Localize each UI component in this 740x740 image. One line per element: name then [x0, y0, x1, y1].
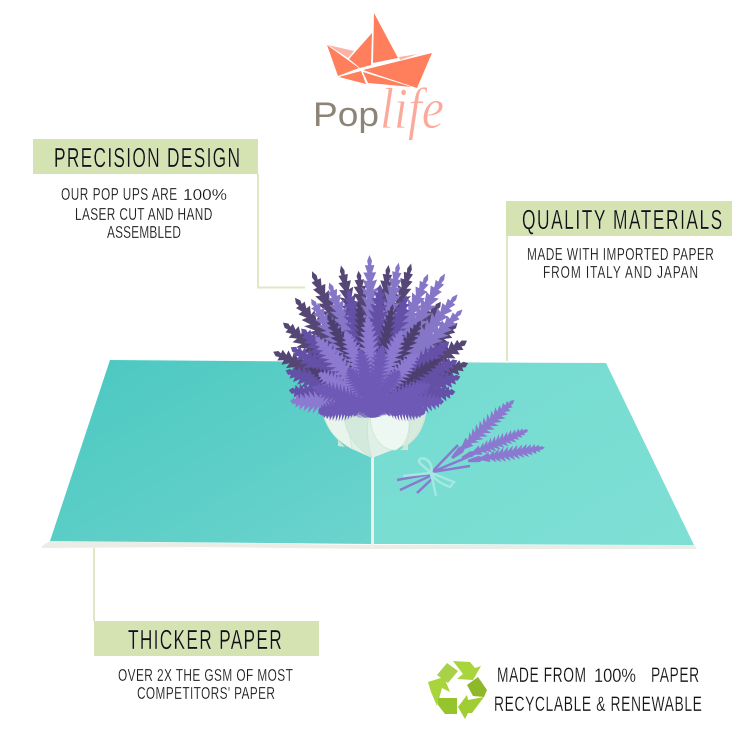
light front sprigs — [290, 316, 426, 417]
callout: quality materials: FROM ITALY AND JAPAN — [543, 263, 698, 283]
callout: thicker paper: COMPETITORS' PAPER — [137, 684, 275, 704]
small lavender cut-out — [397, 394, 546, 496]
lavender bouquet — [268, 255, 473, 424]
callout: quality materials — [506, 201, 732, 283]
card left panel — [50, 360, 371, 544]
open card with pop-up — [42, 255, 697, 549]
callout: thicker paper: THICKER PAPER — [128, 624, 282, 655]
pale rear sprigs — [302, 255, 469, 407]
ribbon bow — [403, 458, 454, 496]
callout: precision design: LASER CUT AND HAND — [75, 205, 212, 225]
logo: Poplife paper boat: life — [380, 76, 444, 141]
logo: Poplife paper boat — [313, 13, 444, 141]
connector lines — [94, 174, 507, 621]
logo: Poplife paper boat: Pop — [313, 96, 379, 134]
callout: quality materials: MADE WITH IMPORTED PAPER — [527, 245, 714, 265]
recyclable statement: PAPER — [651, 663, 699, 687]
card base edge — [42, 541, 697, 549]
front deep sprigs — [309, 343, 444, 424]
callout: precision design: ASSEMBLED — [107, 223, 181, 243]
vase — [320, 403, 427, 458]
callout: thicker paper: OVER 2X THE GSM OF MOST — [118, 666, 293, 686]
icon: recycle symbol — [428, 661, 487, 719]
dark mid accents — [304, 300, 446, 409]
recyclable statement: MADE FROM — [497, 663, 586, 687]
recyclable statement — [494, 663, 702, 716]
callout: precision design: 100% — [183, 187, 227, 204]
dark body — [310, 308, 434, 408]
middle sprigs — [281, 283, 464, 415]
recyclable statement: 100% — [594, 666, 636, 687]
back dark sprigs — [268, 261, 473, 411]
callout: quality materials: QUALITY MATERIALS — [522, 204, 722, 235]
callout: precision design: PRECISION DESIGN — [54, 142, 240, 173]
card right panel — [374, 362, 694, 545]
callout: precision design: OUR POP UPS ARE — [61, 185, 177, 205]
callout: precision design — [33, 139, 258, 243]
callout: thicker paper — [94, 621, 319, 704]
recyclable statement: RECYCLABLE & RENEWABLE — [494, 692, 702, 716]
